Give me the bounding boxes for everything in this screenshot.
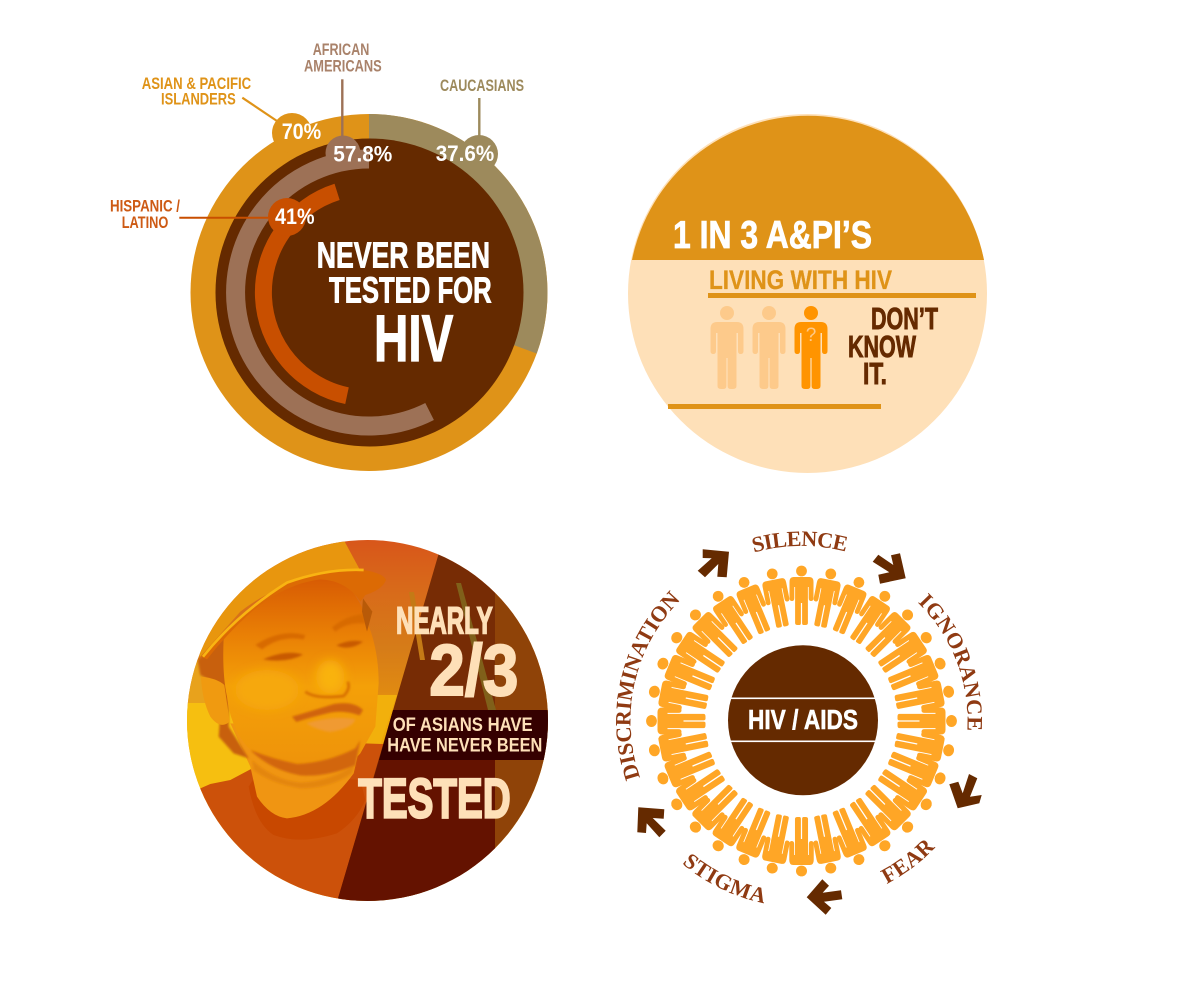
circle background <box>628 114 987 473</box>
cheek highlight <box>242 670 292 708</box>
arc: Hispanic / Latino <box>263 192 347 396</box>
backdrop: yellow right of chin <box>377 695 397 710</box>
center disc <box>216 138 524 446</box>
icon: person 3 with question mark: ? <box>806 325 816 346</box>
panel: never been tested for HIV donut chart <box>110 41 548 471</box>
text: don't know it: IT. <box>863 356 887 391</box>
arrow: top left <box>698 549 729 577</box>
center disc <box>728 645 878 795</box>
heading: never been tested for HIV: TESTED FOR <box>329 269 492 310</box>
moustache <box>292 703 363 722</box>
bubble: 57.8% <box>326 136 360 170</box>
backdrop: left yellow wall <box>187 703 251 800</box>
arc: African Americans <box>236 159 430 426</box>
bubble: 41% <box>268 198 306 236</box>
rule below figures <box>668 404 881 409</box>
text: don't know it <box>848 301 938 391</box>
ring of people <box>646 566 957 876</box>
beard <box>250 740 360 776</box>
icon: person 1 <box>710 306 744 389</box>
nose shadow <box>305 682 349 697</box>
arrow: bottom <box>807 879 842 915</box>
ear <box>201 677 230 725</box>
neck <box>230 723 364 818</box>
photo backdrop <box>187 540 549 902</box>
leader line: Hispanic / Latino <box>179 217 268 219</box>
text: tested: TESTED <box>358 766 511 829</box>
heading: 1 in 3 A&PI's: 1 IN 3 A&PI’S <box>673 214 872 257</box>
heading: never been tested for HIV: NEVER BEEN <box>317 234 490 275</box>
shirt <box>200 744 384 901</box>
hat brim underside <box>201 570 386 659</box>
icon: person 3 with question mark <box>794 306 828 389</box>
ring segment: Caucasians <box>369 114 547 354</box>
label: African Americans: AFRICAN <box>313 41 369 59</box>
collar shadow <box>249 773 365 840</box>
label: Asian and Pacific Islanders: ASIAN & PACIFIC <box>142 75 251 93</box>
top dome <box>632 116 984 260</box>
heading: never been tested for HIV: HIV <box>374 301 453 375</box>
curved label: ignorance: IGNORANCE <box>918 592 982 730</box>
value: 41%: 41% <box>275 204 314 229</box>
label: African Americans: AMERICANS <box>304 58 382 76</box>
outer ring: Asian and Pacific Islanders 70% <box>190 114 548 471</box>
face <box>223 578 379 775</box>
heading: never been tested for HIV <box>317 234 492 375</box>
nose highlight <box>316 660 344 693</box>
neck shadow under chin <box>252 760 355 788</box>
text: don't know it: DON’T <box>871 301 938 336</box>
bubble: 70% <box>272 113 312 153</box>
arrow: top right <box>873 553 906 584</box>
label: Caucasians: CAUCASIANS <box>440 77 524 95</box>
panel: 1 in 3 living with HIV don't know it <box>628 114 987 473</box>
hat brim edge <box>203 570 364 657</box>
arrow: bottom left <box>637 807 666 837</box>
leader line: Asian and Pacific Islanders <box>242 98 277 121</box>
brow and eyes <box>255 614 365 661</box>
background stripes <box>456 583 496 710</box>
value: 70%: 70% <box>282 119 321 144</box>
value: 37.6%: 37.6% <box>436 141 494 166</box>
text: nearly 2/3 <box>397 606 517 698</box>
label: Hispanic / Latino: HISPANIC / <box>110 198 180 216</box>
hair at temple <box>362 598 372 632</box>
bubble: 37.6% <box>460 135 498 173</box>
text: of Asians have have never been: HAVE NEVER BEEN <box>387 736 542 757</box>
label: Asian and Pacific Islanders <box>142 75 251 109</box>
subheading: living with HIV: LIVING WITH HIV <box>709 265 892 295</box>
curved label: discrimination: DISCRIMINATION <box>616 590 680 782</box>
text: don't know it: KNOW <box>848 329 917 364</box>
leader line: African Americans <box>341 79 343 137</box>
curved label: silence: SILENCE <box>752 531 847 552</box>
curved label: fear: FEAR <box>880 840 936 884</box>
right overlay strip <box>495 592 548 848</box>
center disc bands <box>728 698 878 742</box>
text: nearly 2/3: NEARLY <box>396 600 493 642</box>
hat crown <box>199 542 359 656</box>
text: nearly 2/3: 2/3 <box>429 631 518 711</box>
lower dark overlay <box>336 760 495 905</box>
icon: person 2 <box>752 306 786 389</box>
panel: nearly 2/3 of Asians never tested, portrait <box>184 537 555 910</box>
rule under subheading <box>708 293 976 298</box>
label: African Americans <box>304 41 382 76</box>
label: Hispanic / Latino: LATINO <box>122 214 168 232</box>
text: of Asians have have never been: OF ASIANS HAVE <box>393 715 533 736</box>
hair <box>198 637 249 758</box>
dark overlay panel <box>338 540 495 898</box>
center label: HIV / AIDS: HIV / AIDS <box>748 704 858 735</box>
text bar <box>379 710 555 760</box>
lips <box>306 718 355 732</box>
infographic canvas <box>110 44 987 915</box>
leader line: Caucasians <box>478 98 480 137</box>
arrow: right <box>949 774 982 808</box>
portrait illustration <box>184 537 427 910</box>
panel: cycle around HIV / AIDS <box>616 531 982 915</box>
backdrop: left orange sliver <box>188 660 205 703</box>
label: Asian and Pacific Islanders: ISLANDERS <box>161 91 236 109</box>
label: Hispanic / Latino <box>110 198 180 232</box>
curved label: stigma: STIGMA <box>683 854 764 904</box>
value: 57.8%: 57.8% <box>333 142 392 166</box>
text: of Asians have have never been <box>388 718 542 752</box>
